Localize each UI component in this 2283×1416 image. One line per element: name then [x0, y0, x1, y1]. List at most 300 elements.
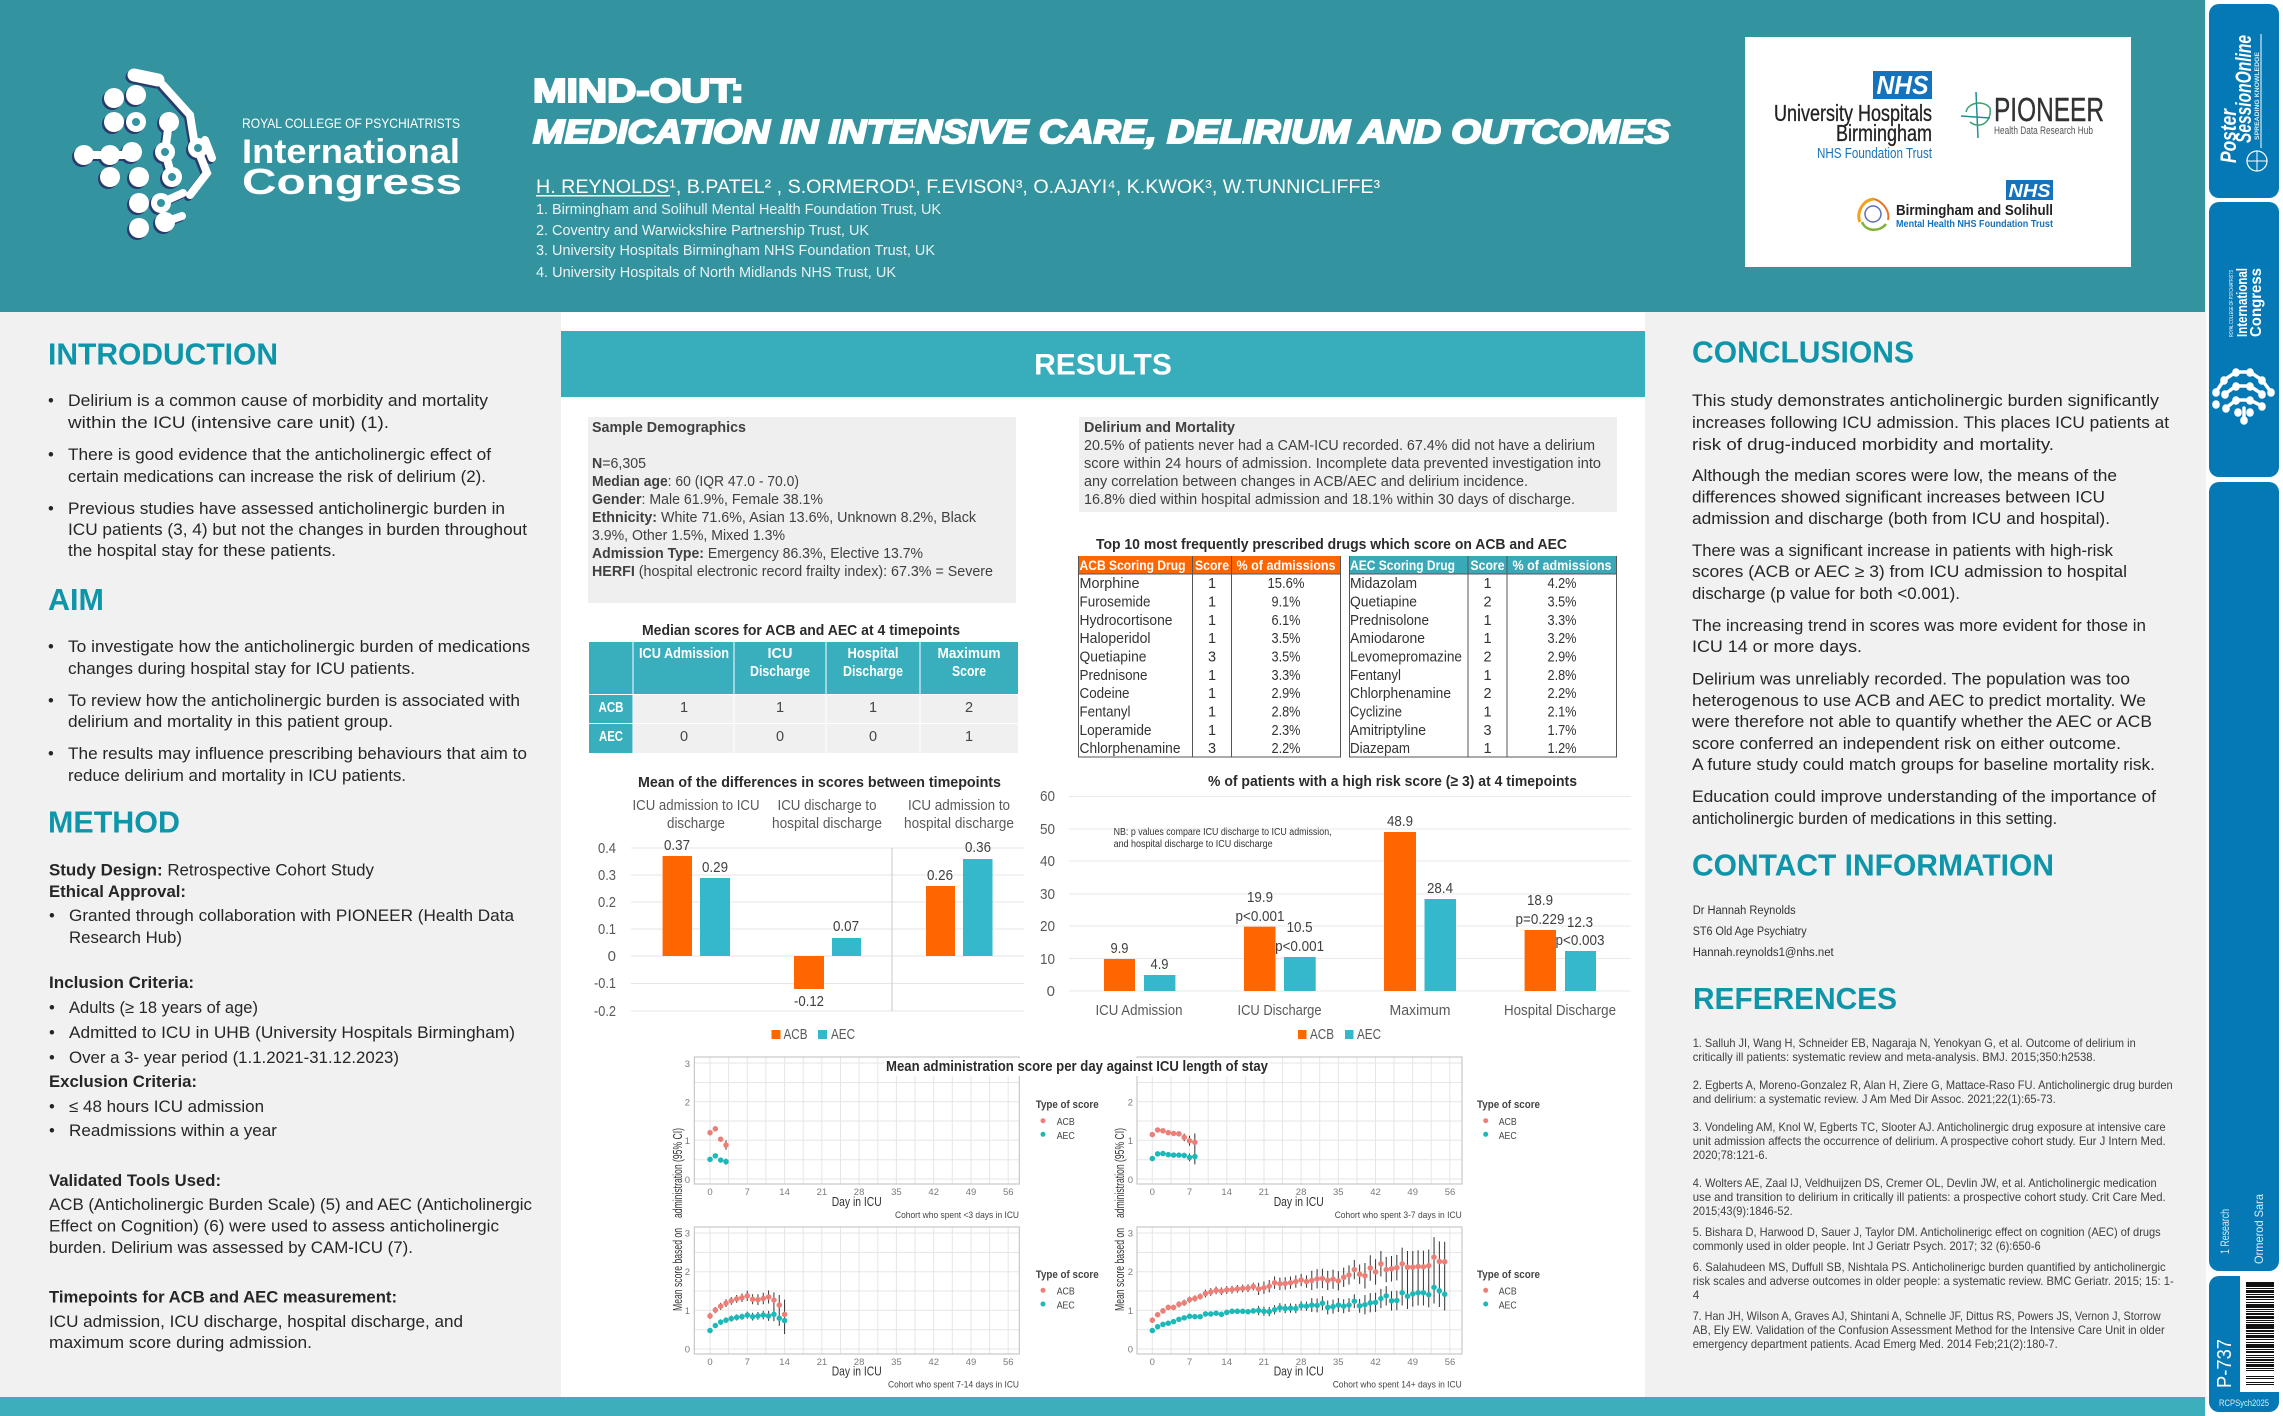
y axis label left — [671, 1128, 685, 1311]
table: ACB scoring drugs: 3.5% — [1272, 631, 1301, 647]
chart panel: 3-7 days: 0 — [1150, 1187, 1155, 1198]
panel: conclusions, contact and references — [1691, 336, 2174, 1351]
table: AEC scoring drugs: 3 — [1483, 723, 1492, 739]
legend: ACB — [1057, 1116, 1075, 1128]
chart panel: 3-7 days: 42 — [1370, 1187, 1381, 1198]
table: AEC scoring drugs: 2.1% — [1548, 704, 1577, 720]
bar chart: mean of the differences: -0.12 — [794, 993, 824, 1010]
table: AEC scoring drugs: 2 — [1483, 686, 1492, 702]
heading: references: REFERENCES — [1693, 982, 1897, 1016]
chart panel: 7-14 days: 35 — [891, 1357, 902, 1368]
text block: method: ≤ 48 hours ICU admission — [69, 1098, 264, 1116]
chart panel: 3-7 days: 7 — [1187, 1187, 1192, 1198]
logo: Birmingham and Solihull NHS: Mental Health NHS Foundation Trust — [1896, 218, 2053, 230]
text block: method: • — [49, 1122, 55, 1140]
table: AEC scoring drugs: Fentanyl — [1350, 668, 1401, 684]
heading: results banner: RESULTS — [1034, 348, 1172, 382]
text block: method — [49, 862, 532, 1352]
text block: conclusions — [1691, 392, 2169, 828]
table: AEC scoring drugs: Amitriptyline — [1350, 723, 1426, 739]
chart panel: 14+ days: 35 — [1333, 1357, 1344, 1368]
logo: Royal College of Psychiatrists International Congress: International — [242, 133, 460, 171]
chart panel: 3-7 days: 1 — [1128, 1136, 1133, 1147]
text block: method: Study Design: Retrospective Cohort Study — [49, 862, 375, 880]
chart panel: 7-14 days: 0 — [707, 1357, 713, 1368]
text block: conclusions: The increasing trend in scores was more evident for those in — [1692, 617, 2146, 635]
logo: NHS University Hospitals Birmingham: NHS Foundation Trust — [1817, 146, 1932, 162]
table: AEC scoring drugs: 1.2% — [1548, 741, 1577, 757]
table: ACB scoring drugs: Chlorphenamine — [1080, 741, 1180, 757]
text block: references: 2015;43(9):1846-52. — [1693, 1204, 1793, 1218]
legend: Type of score — [1036, 1269, 1099, 1281]
chart panel: 3-7 days: 2 — [1128, 1098, 1133, 1108]
panel: delirium and mortality: 20.5% of patients never had a CAM-ICU recorded. 67.4% did not have a delirium — [1084, 438, 1595, 454]
chart panel: 14+ days: 2 — [1128, 1267, 1133, 1278]
chart panel: 3-7 days: 21 — [1259, 1187, 1269, 1198]
table: AEC scoring drugs: AEC Scoring Drug — [1350, 557, 1455, 573]
legend — [1036, 1099, 1099, 1142]
affiliations: 1. Birmingham and Solihull Mental Health Foundation Trust, UK — [536, 202, 941, 218]
text block: conclusions: score conferred an independent risk on either outcome. — [1692, 735, 2121, 753]
table: median scores: 0 — [680, 729, 688, 745]
logo: PIONEER: Health Data Research Hub — [1994, 125, 2093, 137]
bar chart: high risk score percentages — [1040, 773, 1631, 1043]
text block: references: critically ill patients: systematic review and meta-analysis. BMJ. 2015;350:h2538. — [1693, 1050, 2096, 1064]
chart panel: under 3 days: 2 — [685, 1098, 690, 1108]
y axis label right: Mean score based on — [1113, 1228, 1127, 1311]
bar chart: high risk score percentages: 10 — [1040, 951, 1055, 968]
affiliations: 4. University Hospitals of North Midlands NHS Trust, UK — [536, 265, 896, 281]
table: median scores: 1 — [965, 729, 973, 745]
chart panel: 3-7 days: 56 — [1445, 1187, 1455, 1198]
chart panel: 3-7 days — [1128, 1057, 1540, 1221]
table: ACB scoring drugs: 1 — [1208, 576, 1216, 592]
table title: Median scores for ACB and AEC at 4 timepoints — [642, 622, 960, 639]
note: NB: p values compare ICU discharge to ICU admission, — [1114, 827, 1332, 838]
table: ACB scoring drugs: 3.5% — [1272, 650, 1301, 666]
table: ACB scoring drugs: 15.6% — [1268, 576, 1305, 592]
bar chart: high risk score percentages: 4.9 — [1150, 956, 1168, 973]
text block: introduction: Delirium is a common cause of morbidity and mortality — [68, 392, 489, 410]
text block: contact details: ST6 Old Age Psychiatry — [1693, 926, 1807, 938]
table: AEC scoring drugs: % of admissions — [1512, 557, 1612, 573]
text block: introduction: Previous studies have assessed anticholinergic burden in — [68, 500, 505, 518]
bar chart: high risk score percentages: ICU Discharge — [1238, 1002, 1322, 1019]
bar chart: mean of the differences: 0.3 — [598, 867, 616, 884]
side strip: International Congress tab: International — [2234, 268, 2251, 337]
table: median scores: Discharge — [750, 664, 810, 680]
text block: method: Adults (≥ 18 years of age) — [69, 999, 258, 1017]
text block: introduction: • — [48, 500, 54, 518]
text block: conclusions: Delirium was unreliably recorded. The population was too — [1692, 670, 2130, 688]
bar chart: high risk score percentages: p<0.001 — [1275, 938, 1324, 955]
chart group: mean administration score per day — [671, 1057, 1540, 1390]
bar chart: mean of the differences: -0.2 — [594, 1003, 616, 1020]
partner logos panel — [1745, 37, 2131, 267]
text block: method: • — [49, 1098, 55, 1116]
text block: conclusions: There was a significant increase in patients with high-risk — [1692, 542, 2114, 560]
table: ACB scoring drugs: Score — [1195, 557, 1229, 573]
text block: conclusions: risk of drug-induced morbidity and mortality. — [1692, 436, 2054, 454]
chart panel: 7-14 days: 0 — [685, 1344, 690, 1356]
table: median scores: ACB — [598, 700, 624, 716]
text block: method: Granted through collaboration with PIONEER (Health Data — [69, 907, 515, 925]
table: AEC scoring drugs: 2 — [1483, 650, 1492, 666]
side strip: poster ID and barcode — [2209, 1276, 2279, 1412]
table: median scores: 1 — [680, 700, 688, 716]
table: ACB scoring drugs: 2.3% — [1272, 723, 1301, 739]
heading: introduction: INTRODUCTION — [48, 338, 278, 372]
chart panel: under 3 days — [685, 1057, 1099, 1221]
chart panel: 3-7 days: 28 — [1296, 1187, 1306, 1198]
table: ACB scoring drugs: 3.3% — [1272, 668, 1301, 684]
text block: aim: reduce delirium and mortality in ICU patients. — [68, 767, 406, 785]
text block: references: 4. Wolters AE, Zaal IJ, Veldhuijzen DS, Cremer OL, Devlin JW, et al. Anticholinergic medication — [1693, 1176, 2157, 1190]
text block: conclusions: heterogenous to use ACB and AEC to predict mortality. We — [1692, 692, 2146, 710]
table: ACB scoring drugs: Quetiapine — [1080, 650, 1146, 666]
chart panel: 7-14 days: 1 — [685, 1306, 690, 1317]
table: ACB scoring drugs: Fentanyl — [1080, 704, 1130, 720]
table: ACB scoring drugs: 6.1% — [1272, 613, 1301, 629]
table: median scores: ICU Admission — [639, 646, 729, 662]
text block: method: Inclusion Criteria: — [49, 974, 194, 992]
table: AEC scoring drugs: Chlorphenamine — [1350, 686, 1451, 702]
panel: sample demographics: 3.9%, Other 1.5%, Mixed 1.3% — [592, 528, 785, 544]
table title: Top 10 most frequently prescribed drugs which score on ACB and AEC — [1096, 536, 1567, 553]
bar chart: mean of the differences: 0.4 — [598, 840, 616, 857]
chart panel: 14+ days: 42 — [1370, 1357, 1381, 1368]
header banner — [0, 0, 2205, 312]
bar chart: high risk score percentages: 60 — [1040, 788, 1055, 805]
note: and hospital discharge to ICU discharge — [1114, 839, 1273, 850]
legend: ACB — [1499, 1116, 1517, 1128]
table: ACB scoring drugs: Hydrocortisone — [1080, 613, 1172, 629]
table: AEC scoring drugs: Quetiapine — [1350, 594, 1417, 610]
table: AEC scoring drugs: Amiodarone — [1350, 631, 1425, 647]
chart panel: 7-14 days: 28 — [854, 1357, 864, 1368]
table: AEC scoring drugs: 1 — [1483, 613, 1492, 629]
panel: sample demographics: Admission Type: Emergency 86.3%, Elective 13.7% — [592, 546, 923, 562]
legend — [1477, 1269, 1540, 1312]
table: median scores: AEC — [599, 729, 623, 745]
text block: method: Effect on Cognition) (6) were used to assess anticholinergic — [49, 1218, 499, 1236]
text block: references: 1. Salluh JI, Wang H, Schneider EB, Nagaraja N, Yenokyan G, et al. Outcome of delirium in — [1693, 1036, 2136, 1050]
table: ACB scoring drugs: 1 — [1208, 686, 1216, 702]
chart panel: under 3 days: 0 — [685, 1175, 690, 1186]
table: median scores: Hospital — [848, 646, 898, 662]
table: AEC scoring drugs: Diazepam — [1350, 741, 1410, 757]
legend: AEC — [831, 1026, 855, 1043]
bar chart: mean of the differences: ICU admission to ICU — [632, 797, 760, 814]
heading: method: METHOD — [48, 806, 180, 840]
table: top 10 drugs — [1078, 536, 1616, 757]
y axis label right — [1113, 1128, 1127, 1311]
bar chart: mean of the differences: 0.2 — [598, 894, 616, 911]
text block: aim: • — [48, 745, 54, 763]
logo: NHS University Hospitals Birmingham: Birmingham — [1836, 120, 1932, 146]
logo: Birmingham and Solihull NHS: Birmingham and Solihull — [1896, 202, 2053, 219]
text block: aim: The results may influence prescribing behaviours that aim to — [68, 745, 527, 763]
chart panel: 7-14 days: 3 — [685, 1228, 690, 1240]
authors: H. REYNOLDS¹, B.PATEL² , S.ORMEROD¹, F.EVISON³, O.AJAYI⁴, K.KWOK³, W.TUNNICLIFFE³ — [536, 177, 1380, 198]
side strip: author tab: Ormerod Sara — [2252, 1194, 2266, 1264]
table: ACB scoring drugs: 2.8% — [1272, 704, 1301, 720]
chart title: % of patients with a high risk score (≥ 3) at 4 timepoints — [1208, 773, 1577, 790]
chart panel: 14+ days: 56 — [1445, 1357, 1455, 1368]
chart panel: under 3 days: 14 — [779, 1187, 790, 1198]
bar chart: mean of the differences: -0.1 — [594, 975, 616, 992]
table: AEC scoring drugs: Score — [1470, 557, 1505, 573]
text block: method: burden. Delirium was assessed by CAM-ICU (7). — [49, 1239, 413, 1257]
bar chart: mean of the differences: hospital discharge — [772, 815, 882, 832]
side strip: Poster Session Online tab: SPREADING KNOWLEDGE — [2255, 52, 2261, 140]
text block: method: • — [49, 907, 55, 925]
table: ACB scoring drugs: ACB Scoring Drug — [1080, 557, 1186, 573]
text block: method: • — [49, 1024, 55, 1042]
text block: references: AB, Ely EW. Validation of the Confusion Assessment Method for the Intensive Care Unit in older — [1693, 1323, 2165, 1337]
chart panel: 14+ days: Cohort who spent 14+ days in ICU — [1333, 1380, 1462, 1390]
legend — [772, 1026, 855, 1043]
table: AEC scoring drugs: 1 — [1483, 668, 1492, 684]
text block: introduction: within the ICU (intensive care unit) (1). — [67, 414, 389, 432]
bar chart: high risk score percentages: 48.9 — [1387, 813, 1413, 830]
text block: conclusions: increases following ICU admission. This places ICU patients at — [1692, 414, 2169, 432]
text block: conclusions: scores (ACB or AEC ≥ 3) from ICU admission to hospital — [1692, 563, 2127, 581]
table: ACB scoring drugs: 1 — [1208, 704, 1216, 720]
legend — [1298, 1026, 1381, 1043]
table: median scores: 1 — [776, 700, 784, 716]
table: AEC scoring drugs: Prednisolone — [1350, 613, 1429, 629]
affiliations: 2. Coventry and Warwickshire Partnership Trust, UK — [536, 223, 869, 239]
logo: Royal College of Psychiatrists International Congress: ROYAL COLLEGE OF PSYCHIATRISTS — [242, 115, 460, 131]
bottom bar — [0, 1397, 2205, 1416]
text block: references: commonly used in older people. Int J Geriatr Psych. 2017; 32 (6):650-6 — [1693, 1239, 2041, 1253]
legend: Type of score — [1477, 1269, 1540, 1281]
text block: method: ICU admission, ICU discharge, hospital discharge, and — [49, 1313, 463, 1331]
chart panel: 14+ days: 28 — [1296, 1357, 1306, 1368]
text block: references: use and transition to delirium in critically ill patients: a prospective cohort study. Crit Care Med. — [1693, 1190, 2166, 1204]
heading: conclusions: CONCLUSIONS — [1692, 336, 1914, 370]
panel: delirium and mortality: Delirium and Mortality — [1084, 420, 1235, 436]
panel: sample demographics: Gender: Male 61.9%, Female 38.1% — [592, 492, 823, 508]
heading: results banner — [561, 331, 1645, 397]
icon: brain dots logo — [2216, 372, 2271, 421]
chart panel: under 3 days: 0 — [707, 1187, 713, 1198]
chart panel: 7-14 days: 42 — [928, 1357, 939, 1368]
bar chart: high risk score percentages: 18.9 — [1527, 892, 1553, 909]
legend — [1036, 1269, 1099, 1312]
text block: aim: To investigate how the anticholinergic burden of medications — [68, 638, 530, 656]
text block: aim: delirium and mortality in this patient group. — [68, 713, 393, 731]
bar chart: mean of the differences: 0.36 — [965, 839, 991, 856]
chart group title: Mean administration score per day against ICU length of stay — [886, 1059, 1268, 1075]
table: AEC scoring drugs: 4.2% — [1548, 576, 1577, 592]
text block: aim: • — [48, 692, 54, 710]
bar chart: high risk score percentages: p<0.001 — [1236, 908, 1284, 925]
legend: AEC — [1499, 1300, 1517, 1312]
table: AEC scoring drugs: 1 — [1483, 741, 1492, 757]
panel: delirium and mortality: any correlation between changes in ACB/AEC and delirium incidence. — [1084, 474, 1528, 490]
table: ACB scoring drugs: 2.2% — [1272, 741, 1301, 757]
chart panel: under 3 days: 35 — [891, 1187, 902, 1198]
chart panel: 14+ days: 7 — [1187, 1357, 1192, 1368]
panel: sample demographics — [588, 417, 1016, 603]
text block: contact details — [1693, 905, 1834, 959]
text block: method: Exclusion Criteria: — [49, 1073, 197, 1091]
chart panel: under 3 days: 49 — [966, 1187, 976, 1198]
table: ACB scoring drugs: 3 — [1208, 741, 1216, 757]
table: AEC scoring drugs: 1.7% — [1548, 723, 1577, 739]
table: ACB scoring drugs: Furosemide — [1080, 594, 1150, 610]
chart panel: 7-14 days: 21 — [817, 1357, 827, 1368]
chart panel: under 3 days: Cohort who spent <3 days in ICU — [895, 1210, 1019, 1221]
side strip: Poster Session Online tab: Poster — [2216, 108, 2241, 163]
note — [1114, 827, 1332, 850]
side strip: International Congress tab — [2209, 202, 2279, 477]
table: median scores: Score — [952, 664, 986, 680]
legend: AEC — [1499, 1130, 1517, 1142]
table: median scores — [589, 622, 1018, 753]
table: AEC scoring drugs: 2.2% — [1548, 686, 1577, 702]
table: AEC scoring drugs: Cyclizine — [1350, 704, 1402, 720]
chart panel: 14+ days: 21 — [1259, 1357, 1269, 1368]
bar chart: mean of the differences: hospital discharge — [904, 815, 1014, 832]
logo: PIONEER: PIONEER — [1994, 91, 2104, 128]
table: median scores: 0 — [776, 729, 784, 745]
bar chart: mean of the differences: ICU admission to — [908, 797, 1010, 814]
text block: references: risk scales and adverse outcomes in older people: a systematic review. BMC Geriatr. 2015; 15: 1- — [1693, 1274, 2174, 1288]
text block: conclusions: differences showed significant increases between ICU — [1692, 488, 2105, 506]
bar chart: high risk score percentages: p=0.229 — [1516, 911, 1564, 928]
text block: introduction: the hospital stay for these patients. — [68, 542, 336, 560]
chart panel: 3-7 days: 0 — [1128, 1175, 1133, 1186]
chart panel: 3-7 days: 35 — [1333, 1187, 1344, 1198]
logo: Royal College of Psychiatrists International Congress: Congress — [242, 161, 462, 202]
bar chart: high risk score percentages: 28.4 — [1427, 880, 1453, 897]
heading: contact information: CONTACT INFORMATION — [1692, 848, 2054, 882]
bar chart: high risk score percentages: 12.3 — [1567, 914, 1593, 931]
panel: sample demographics: HERFI (hospital electronic record frailty index): 67.3% = Severe — [592, 564, 993, 580]
legend: ACB — [1057, 1286, 1075, 1298]
logo: Royal College of Psychiatrists International Congress — [82, 75, 462, 230]
text block: method: ACB (Anticholinergic Burden Scale) (5) and AEC (Anticholinergic — [49, 1196, 532, 1214]
table: median scores: Discharge — [843, 664, 903, 680]
table: AEC scoring drugs: 1 — [1483, 631, 1492, 647]
heading: aim: AIM — [48, 583, 104, 617]
title — [533, 72, 1670, 150]
text block: method: Admitted to ICU in UHB (University Hospitals Birmingham) — [69, 1024, 515, 1042]
chart panel: 14+ days: 49 — [1407, 1357, 1418, 1368]
y axis label left: Mean score based on — [671, 1228, 685, 1311]
table: median scores: 0 — [869, 729, 877, 745]
bar chart: high risk score percentages: 30 — [1040, 886, 1055, 903]
bar chart: mean of the differences: 0.26 — [927, 867, 953, 884]
text block: references: 7. Han JH, Wilson A, Graves AJ, Shintani A, Schnelle JF, Dittus RS, Powers JS, Vernon J, Storrow — [1693, 1309, 2161, 1323]
chart panel: under 3 days: 42 — [928, 1187, 939, 1198]
y axis label right: administration (95% CI) — [1113, 1128, 1127, 1218]
chart panel: 14+ days: Day in ICU — [1274, 1364, 1324, 1378]
table: ACB scoring drugs: 1 — [1208, 613, 1216, 629]
bar chart: high risk score percentages: Hospital Discharge — [1504, 1002, 1616, 1019]
table: AEC scoring drugs — [1349, 556, 1616, 757]
legend: ACB — [1499, 1286, 1517, 1298]
legend: AEC — [1357, 1026, 1381, 1043]
bar chart: high risk score percentages: 0 — [1047, 983, 1055, 1000]
chart panel: under 3 days: 56 — [1003, 1187, 1014, 1198]
legend: ACB — [784, 1026, 808, 1043]
text block: references: and delirium: a systematic review. J Am Med Dir Assoc. 2021;22(1):65-73. — [1693, 1092, 2056, 1106]
text block: references: 4 — [1693, 1288, 1700, 1302]
text block: method: maximum score during admission. — [49, 1334, 312, 1352]
table: ACB scoring drugs: 1 — [1208, 631, 1216, 647]
chart panel: 14+ days: 0 — [1128, 1344, 1133, 1356]
bar chart: high risk score percentages: 20 — [1040, 918, 1055, 935]
bar chart: high risk score percentages: 19.9 — [1247, 889, 1273, 906]
chart panel: 14+ days: 3 — [1128, 1228, 1133, 1240]
chart panel: 7-14 days: 7 — [745, 1357, 750, 1368]
table: AEC scoring drugs: 1 — [1483, 704, 1492, 720]
text block: aim: • — [48, 638, 54, 656]
chart panel: 7-14 days: 2 — [685, 1267, 690, 1278]
text block: references: 5. Bishara D, Harwood D, Sauer J, Taylor DM. Anticholinerigc effect on cognition (AEC) of drugs — [1693, 1225, 2161, 1239]
chart panel: 14+ days: 14 — [1221, 1357, 1232, 1368]
text block: references — [1693, 1036, 2174, 1351]
table: ACB scoring drugs: 3 — [1208, 650, 1216, 666]
table: AEC scoring drugs: 1 — [1483, 576, 1492, 592]
chart panel: under 3 days: 21 — [817, 1187, 827, 1198]
text block: introduction: • — [48, 446, 54, 464]
bar chart: high risk score percentages: p<0.003 — [1556, 932, 1604, 949]
table: ACB scoring drugs: 2.9% — [1272, 686, 1301, 702]
bar chart: mean of the differences: discharge — [667, 815, 725, 832]
text block: introduction: ICU patients (3, 4) but not the changes in burden throughout — [68, 521, 527, 539]
table: median scores: Maximum — [938, 646, 1000, 662]
text block: method: Research Hub) — [69, 929, 182, 947]
logo: PIONEER — [1961, 91, 2104, 138]
table: median scores: 1 — [869, 700, 877, 716]
logo: NHS University Hospitals Birmingham — [1774, 70, 1932, 162]
text block: contact details: Dr Hannah Reynolds — [1693, 905, 1796, 917]
legend: AEC — [1057, 1130, 1075, 1142]
table: ACB scoring drugs — [1078, 556, 1340, 757]
table: ACB scoring drugs: Prednisone — [1080, 668, 1148, 684]
text block: conclusions: Although the median scores were low, the means of the — [1692, 467, 2117, 485]
table: AEC scoring drugs: 2.8% — [1548, 668, 1577, 684]
panel: sample demographics: Sample Demographics — [592, 420, 746, 436]
panel: delirium and mortality: score within 24 hours of admission. Incomplete data prevented investigation into — [1084, 456, 1601, 472]
text block: references: emergency department patients. Acad Emerg Med. 2014 Feb;21(2):180-7. — [1693, 1337, 2058, 1351]
text block: introduction: certain medications can increase the risk of delirium (2). — [68, 468, 486, 486]
table: median scores: ICU — [768, 646, 792, 662]
legend — [1477, 1099, 1540, 1142]
table: ACB scoring drugs: 1 — [1208, 668, 1216, 684]
bar chart: mean of the differences — [594, 774, 1024, 1043]
table: AEC scoring drugs: 2.9% — [1548, 650, 1577, 666]
text block: conclusions: This study demonstrates anticholinergic burden significantly — [1692, 392, 2160, 410]
table: AEC scoring drugs: 2 — [1483, 594, 1492, 610]
bar chart: mean of the differences: 0.29 — [702, 859, 728, 876]
chart panel: 7-14 days — [685, 1227, 1099, 1390]
table: ACB scoring drugs: Morphine — [1080, 576, 1140, 592]
side strip: Poster Session Online tab — [2209, 4, 2279, 198]
chart panel: under 3 days: 1 — [685, 1136, 690, 1147]
legend: AEC — [1057, 1300, 1075, 1312]
table: ACB scoring drugs: 1 — [1208, 594, 1216, 610]
text block: references: unit admission affects the occurrence of delirium. A prospective cohort study. Eur J Intern Med. — [1693, 1134, 2166, 1148]
text block: conclusions: ICU 14 or more days. — [1692, 638, 1862, 656]
affiliations: 3. University Hospitals Birmingham NHS Foundation Trust, UK — [536, 243, 935, 259]
chart panel: 3-7 days: Cohort who spent 3-7 days in ICU — [1335, 1210, 1462, 1221]
